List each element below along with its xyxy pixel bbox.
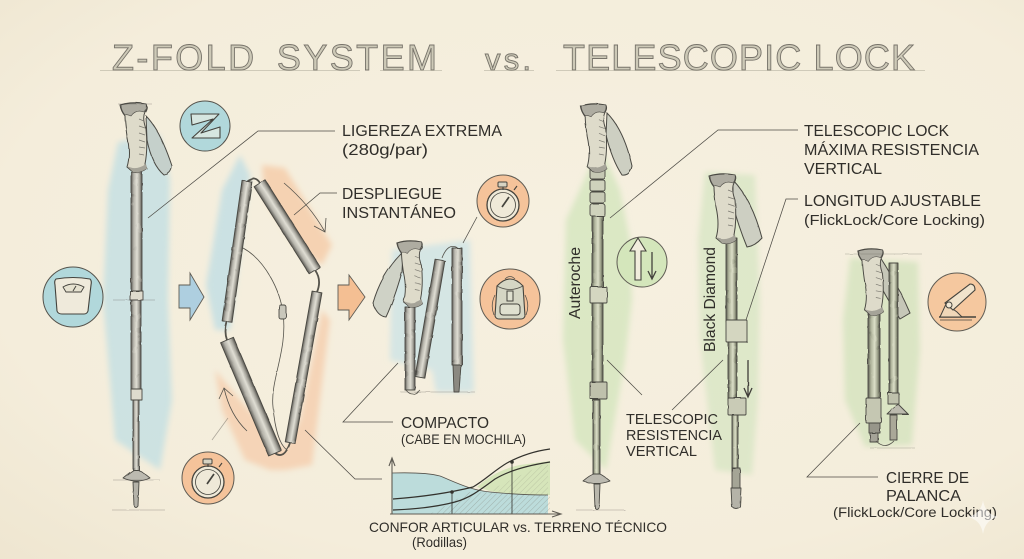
pole: folded compact [373, 241, 475, 394]
label: telescopic lock: MÁXIMA RESISTENCIA [804, 140, 979, 159]
panel: telescopic washes [563, 145, 920, 475]
icon: lever [928, 273, 986, 331]
label: Black Diamond: Black Diamond [702, 247, 719, 352]
label: cierre de palanca: CIERRE DE [886, 470, 969, 487]
label: compacto: COMPACTO [401, 415, 489, 432]
label: compacto: (CABE EN MOCHILA) [401, 432, 526, 447]
label: chart caption: CONFOR ARTICULAR vs. TERRENO TÉCNICO [369, 519, 667, 535]
label: ligereza extrema [342, 123, 502, 159]
arrow: motion top [284, 183, 326, 232]
icon: stopwatch orange top [477, 175, 529, 227]
label: compacto [401, 415, 526, 447]
label: telescopic resistencia vertical: RESISTENCIA [626, 428, 722, 444]
arrow: motion bottom [219, 388, 247, 431]
label: despliegue instantáneo: INSTANTÁNEO [342, 203, 456, 222]
watermark sparkle [968, 500, 998, 534]
label: Auteroche: Auteroche [567, 247, 584, 319]
label: telescopic resistencia vertical [626, 412, 722, 460]
pole: Z-fold unfolded [221, 178, 322, 456]
leader lines [148, 130, 878, 479]
icon: scale [43, 267, 103, 327]
arrow: orange block [338, 275, 365, 320]
label: longitud ajustable: LONGITUD AJUSTABLE [804, 193, 981, 210]
icon: backpack [480, 269, 540, 329]
label: cierre de palanca: (FlickLock/Core Locking) [833, 505, 997, 520]
label: cierre de palanca [833, 470, 997, 520]
panel: Z-fold washes [103, 135, 474, 470]
title: vs. [485, 42, 531, 77]
title: TELESCOPIC LOCK [563, 37, 915, 78]
label: telescopic lock: VERTICAL [804, 161, 882, 178]
title: Z-FOLD SYSTEM [112, 37, 437, 78]
label: chart caption: (Rodillas) [412, 535, 467, 550]
label: cierre de palanca: PALANCA [886, 488, 961, 505]
icon: Z badge [180, 101, 230, 151]
label: telescopic resistencia vertical: VERTICAL [626, 444, 697, 460]
label: telescopic lock [804, 123, 979, 178]
pole: Z-fold extended [112, 103, 172, 510]
label: telescopic lock: TELESCOPIC LOCK [804, 123, 949, 140]
pole: Black Diamond [709, 174, 762, 508]
label: telescopic resistencia vertical: TELESCOPIC [626, 412, 718, 428]
label: ligereza extrema: (280g/par) [342, 142, 428, 159]
arrow: blue block [179, 273, 204, 320]
label: ligereza extrema: LIGEREZA EXTREMA [342, 123, 502, 140]
icon: stopwatch orange bottom [182, 452, 234, 504]
label: despliegue instantáneo: DESPLIEGUE [342, 186, 442, 203]
label: longitud ajustable [804, 193, 985, 229]
pole: Auteroche [576, 104, 632, 510]
title [100, 37, 925, 78]
label: longitud ajustable: (FlickLock/Core Locking) [804, 212, 985, 229]
chart: comfort vs technical terrain [389, 449, 561, 517]
icon: up-down arrows [617, 237, 667, 287]
pole: folded lever-lock [845, 249, 922, 448]
label: despliegue instantáneo [342, 186, 456, 222]
label: chart caption [369, 519, 667, 550]
